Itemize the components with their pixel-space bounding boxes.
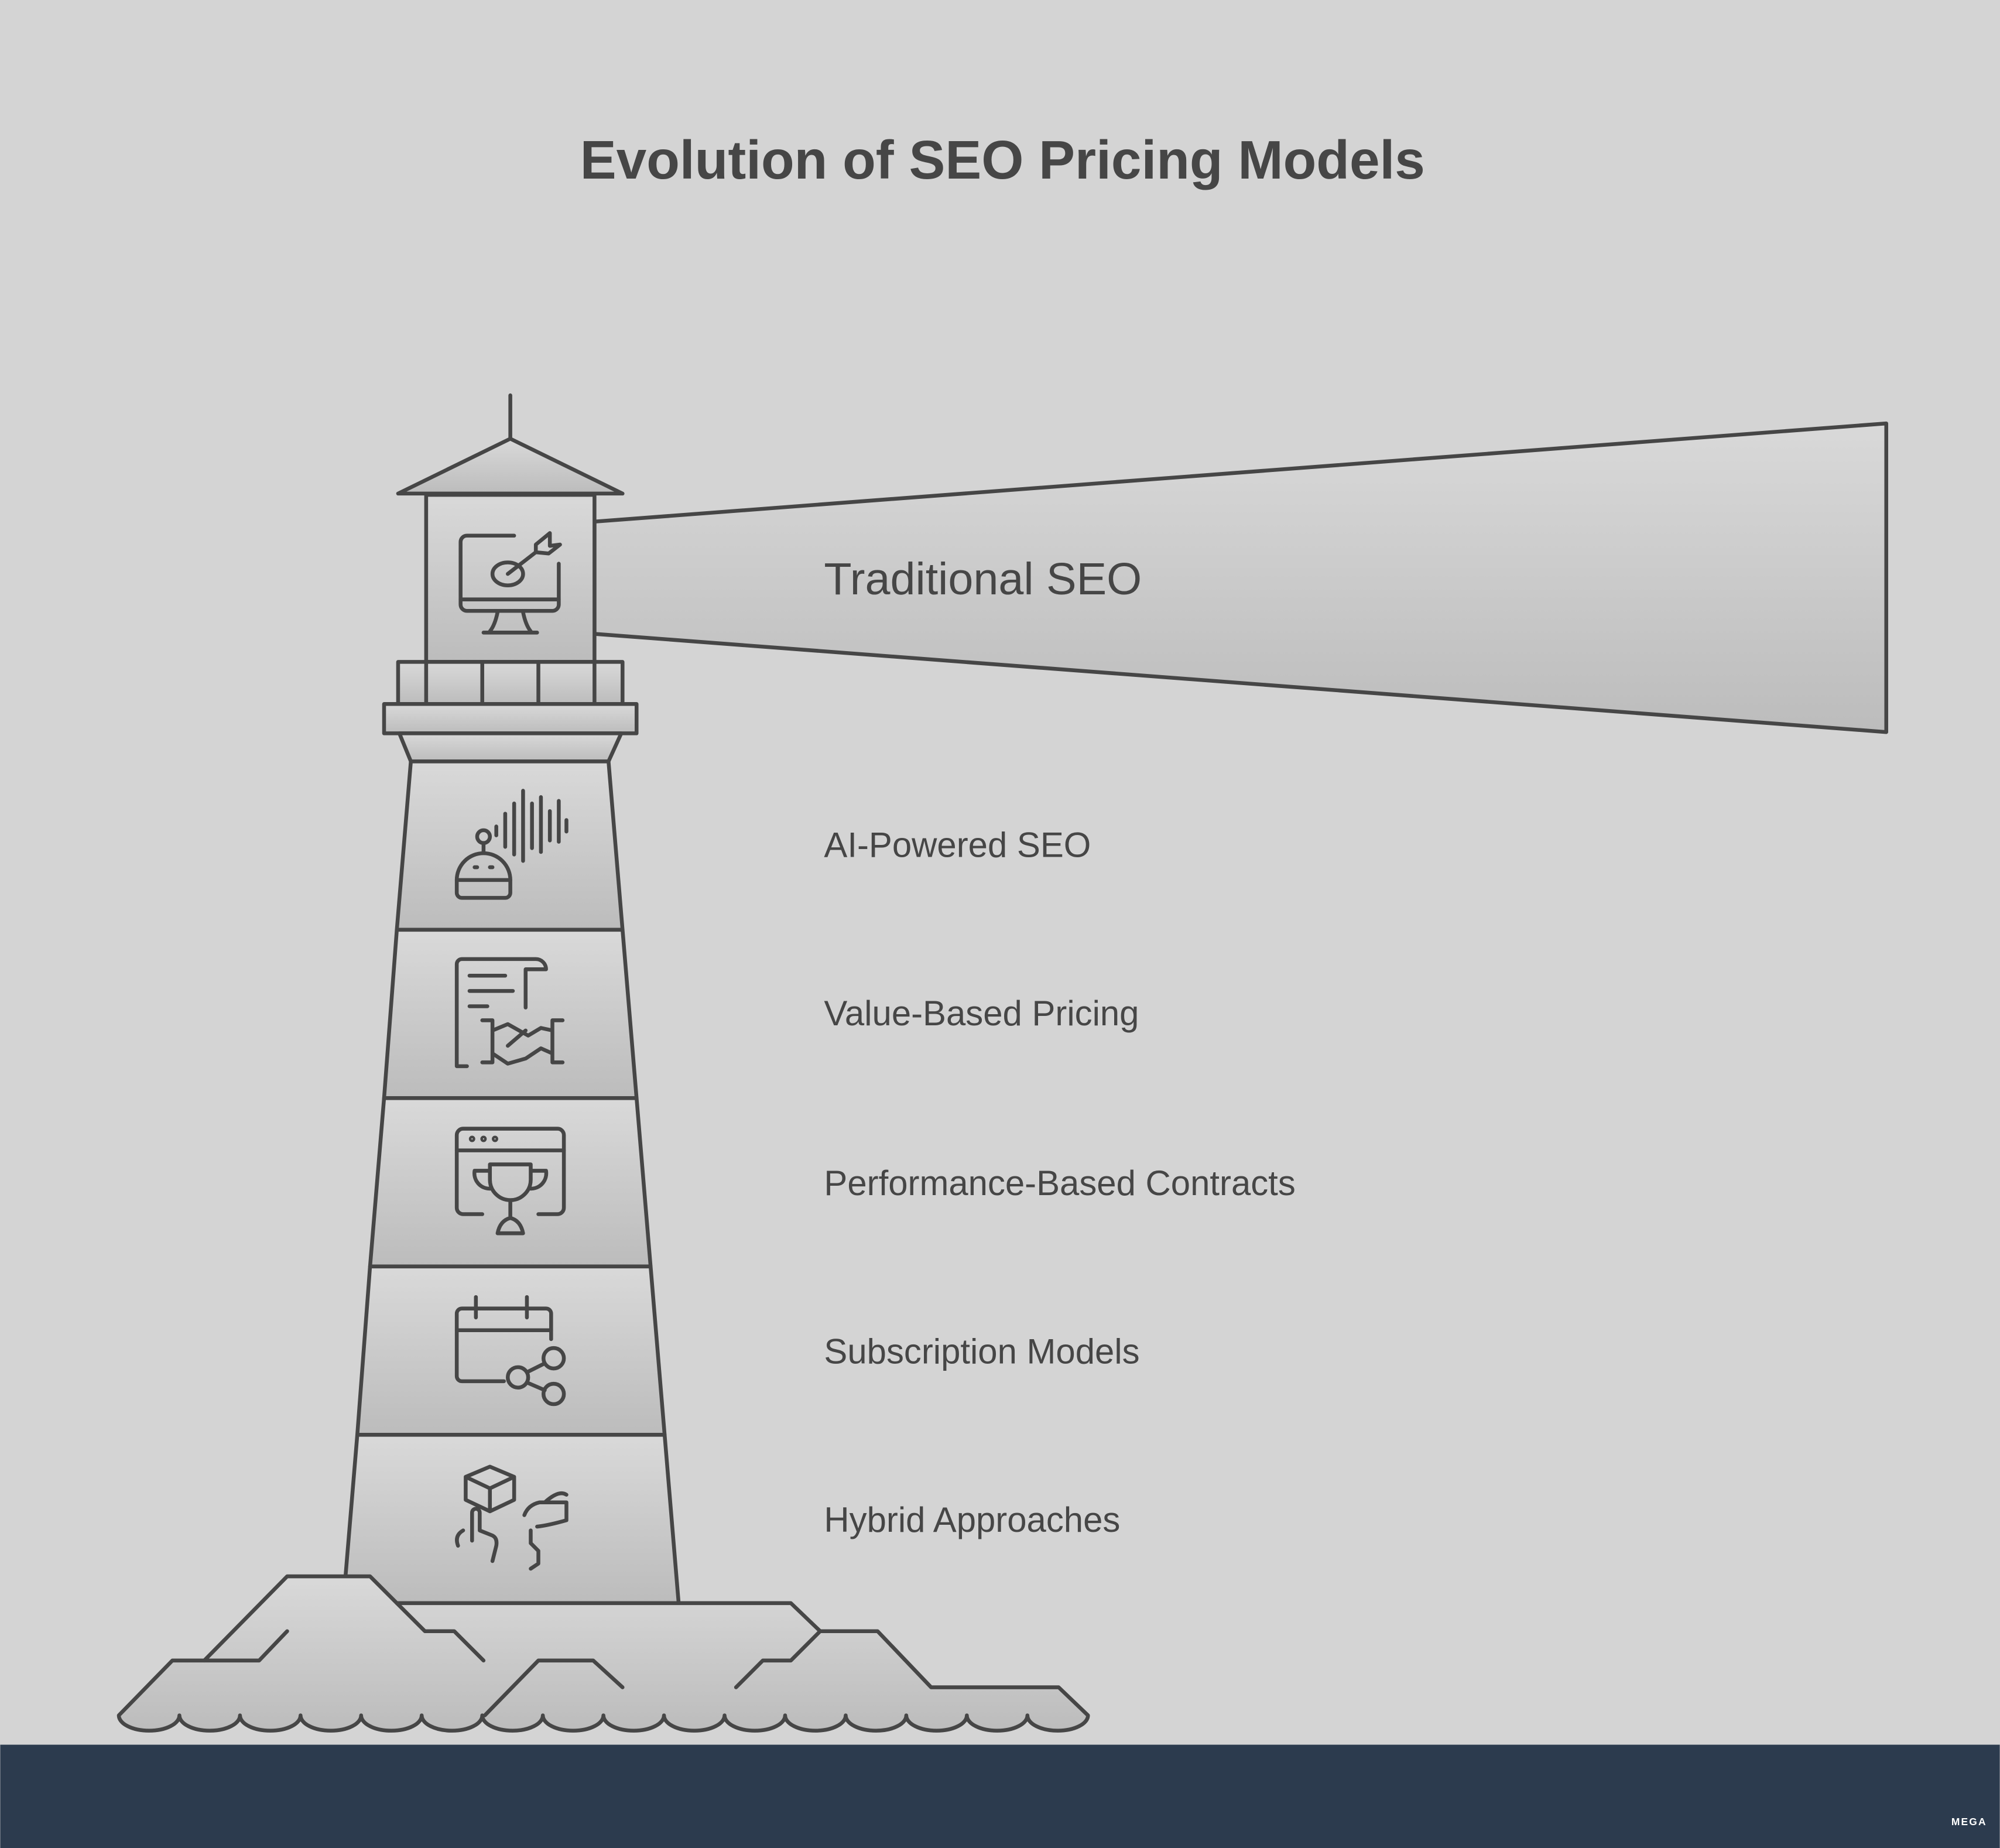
label: Hybrid Approaches: Hybrid Approaches [824, 1500, 1120, 1539]
icon: hybrid hand cube [457, 1467, 566, 1569]
logo: MEGA [1951, 1816, 1987, 1828]
lighthouse [343, 395, 679, 1603]
footer band [0, 1745, 2000, 1848]
labels [824, 826, 1296, 1539]
title: Evolution of SEO Pricing Models [580, 129, 1425, 190]
rocks [119, 1576, 1088, 1731]
icon: robot soundwave [457, 790, 566, 898]
label: Subscription Models: Subscription Models [824, 1332, 1140, 1371]
icon: monitor target [461, 533, 560, 632]
light beam [594, 423, 1886, 732]
icon: calendar share [457, 1297, 564, 1404]
label: Performance-Based Contracts: Performance-Based Contracts [824, 1163, 1296, 1203]
icon: browser trophy [457, 1129, 564, 1233]
icon: contract handshake [457, 959, 563, 1066]
label: AI-Powered SEO: AI-Powered SEO [824, 826, 1091, 865]
label: Traditional SEO: Traditional SEO [824, 554, 1142, 604]
label: Value-Based Pricing: Value-Based Pricing [824, 994, 1139, 1033]
